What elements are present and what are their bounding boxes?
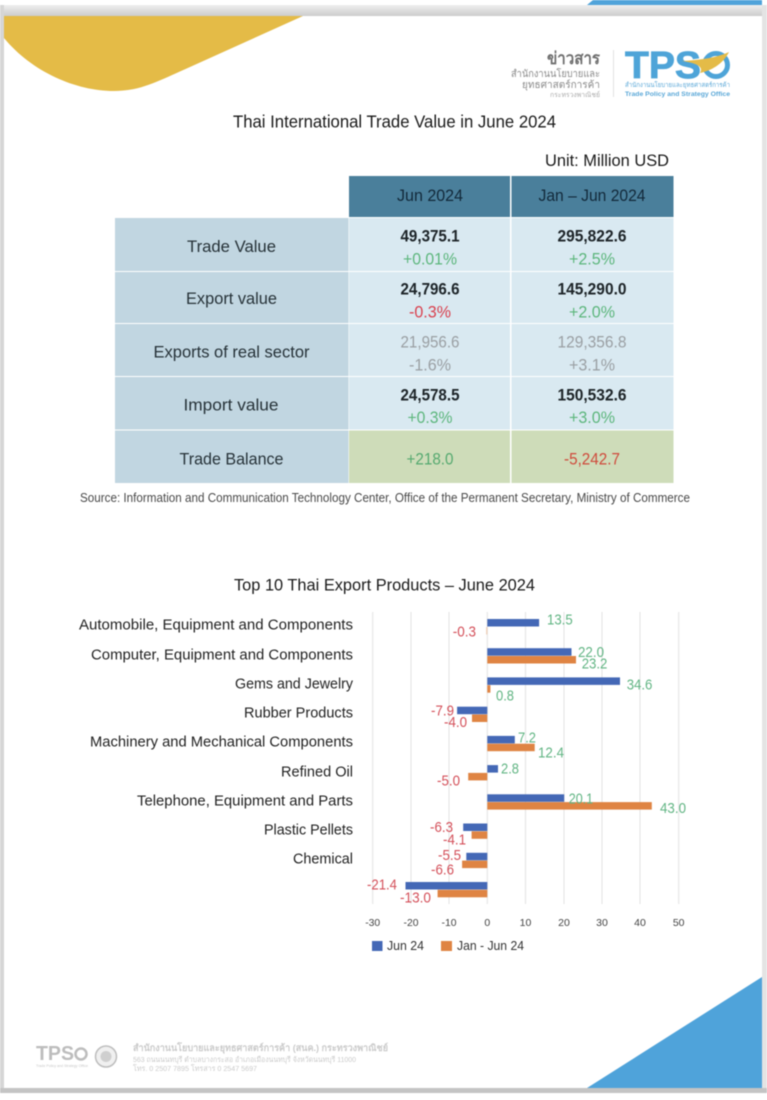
row: trade balance: +218.0 xyxy=(406,450,454,468)
newsletter label: สำนักงานนโยบายและ xyxy=(511,67,600,80)
data labels: -4.1 xyxy=(443,832,466,848)
row: exports of real sector: 21,956.6 xyxy=(400,332,460,352)
table header: Jun 2024 xyxy=(397,186,463,205)
data labels: 12.4 xyxy=(538,744,564,762)
newsletter label: ยุทธศาสตร์การค้า xyxy=(522,79,600,91)
x axis labels: -30 xyxy=(365,917,380,929)
x axis labels: -10 xyxy=(442,917,457,929)
row: trade value: 295,822.6 xyxy=(558,228,626,246)
row: import value: 150,532.6 xyxy=(558,386,626,404)
x axis labels: 50 xyxy=(673,917,685,929)
TPSO logo: สำนักงานนโยบายและยุทธศาสตร์การค้า xyxy=(625,81,730,89)
newsletter label xyxy=(511,49,601,99)
x axis labels: -20 xyxy=(404,917,419,929)
data labels: 0.8 xyxy=(496,688,514,704)
row: exports of real sector: -1.6% xyxy=(409,356,451,374)
blue corner triangle xyxy=(587,977,762,1088)
row: import value: +0.3% xyxy=(408,408,452,427)
data labels: 13.5 xyxy=(547,612,573,628)
unit label: Unit: Million USD xyxy=(545,152,669,170)
row: trade value: +2.5% xyxy=(569,250,615,268)
data labels xyxy=(367,612,686,906)
table header xyxy=(349,176,674,217)
category labels: Computer, Equipment and Components xyxy=(91,646,353,664)
row: trade value: +0.01% xyxy=(403,250,457,268)
data labels: -7.9 xyxy=(431,702,454,720)
data labels: 7.2 xyxy=(518,730,536,746)
row: trade value: 49,375.1 xyxy=(400,228,460,246)
row: export value: Export value xyxy=(186,289,277,308)
data labels: 20.1 xyxy=(569,790,593,808)
bar chart: top 10 export products xyxy=(79,612,686,953)
footer address: 563 ถนนนนทบุรี ตำบลบางกระสอ อำเภอเมืองนนทบุรี จังหวัดนนทบุรี 11000 xyxy=(133,1055,356,1064)
data labels: -21.4 xyxy=(367,876,397,894)
x axis labels: 10 xyxy=(520,917,531,929)
row: trade balance: Trade Balance xyxy=(180,450,284,468)
newsletter label: กระทรวงพาณิชย์ xyxy=(550,91,600,99)
row: export value xyxy=(115,272,674,323)
footer seal xyxy=(96,1046,116,1067)
data labels: -4.0 xyxy=(444,714,467,731)
TPSO logo: Trade Policy and Strategy Office xyxy=(625,91,730,98)
yellow corner shape xyxy=(4,16,303,91)
TPSO logo xyxy=(625,45,730,98)
category labels: Refined Oil xyxy=(281,764,353,780)
footer address xyxy=(133,1042,388,1073)
bars: Jun 24 xyxy=(406,619,620,890)
footer xyxy=(36,1042,388,1073)
x axis labels: 40 xyxy=(634,917,646,929)
data labels: 34.6 xyxy=(627,676,652,694)
bars: Jan - Jun 24 xyxy=(438,627,652,897)
TPSO logo: TPS xyxy=(625,45,701,87)
row: exports of real sector: 129,356.8 xyxy=(558,332,626,352)
row: trade balance xyxy=(115,430,674,483)
row: import value xyxy=(115,377,674,430)
category labels xyxy=(79,616,353,868)
category labels: Chemical xyxy=(293,850,353,868)
category labels: Gems and Jewelry xyxy=(235,676,353,692)
row: exports of real sector xyxy=(115,324,674,376)
trade value table xyxy=(115,176,674,483)
data labels: 2.8 xyxy=(501,760,519,778)
category labels: Telephone, Equipment and Parts xyxy=(137,792,353,810)
source note: Source: Information and Communication Technology Center, Office of the Permanent Secretary, Ministry of Commerce xyxy=(80,491,690,505)
legend: Jun 24 xyxy=(387,938,424,953)
data labels: -5.0 xyxy=(437,772,460,790)
row: export value: +2.0% xyxy=(569,302,615,322)
row: trade value: Trade Value xyxy=(187,237,276,256)
table header: Jan – Jun 2024 xyxy=(538,186,646,205)
legend: Jan - Jun 24 xyxy=(457,938,524,953)
data labels: -5.5 xyxy=(438,847,461,864)
footer logo: TPS xyxy=(36,1043,74,1065)
data labels: -0.3 xyxy=(453,624,476,640)
data labels: 22.0 xyxy=(578,644,604,661)
row: export value: -0.3% xyxy=(409,302,451,322)
category labels: Rubber Products xyxy=(244,704,353,722)
row: import value: Import value xyxy=(184,396,278,414)
category labels: Machinery and Mechanical Components xyxy=(90,734,353,750)
header logo block xyxy=(511,45,730,99)
row: trade balance: -5,242.7 xyxy=(564,450,620,468)
data labels: 43.0 xyxy=(660,800,686,817)
footer address: สำนักงานนโยบายและยุทธศาสตร์การค้า (สนค.) กระทรวงพาณิชย์ xyxy=(133,1042,388,1054)
newsletter label: ข่าวสาร xyxy=(547,49,601,68)
footer logo: Trade Policy and Strategy Office xyxy=(36,1064,88,1068)
row: exports of real sector: Exports of real sector xyxy=(154,342,310,362)
x axis labels xyxy=(365,917,685,929)
legend xyxy=(372,938,524,953)
x axis labels: 30 xyxy=(596,917,608,929)
row: trade value xyxy=(115,218,674,271)
title: trade value: Thai International Trade Value in June 2024 xyxy=(233,112,556,132)
row: export value: 145,290.0 xyxy=(558,280,626,298)
row: exports of real sector: +3.1% xyxy=(569,356,615,374)
x axis labels: 0 xyxy=(484,917,490,929)
footer address: โทร. 0 2507 7895 โทรสาร 0 2547 5697 xyxy=(133,1064,257,1073)
row: import value: 24,578.5 xyxy=(400,386,460,404)
row: export value: 24,796.6 xyxy=(400,280,460,298)
category labels: Plastic Pellets xyxy=(264,822,353,838)
x axis labels: 20 xyxy=(558,917,570,929)
row: import value: +3.0% xyxy=(569,408,615,427)
previous page blue corner xyxy=(587,0,762,5)
footer logo xyxy=(36,1043,88,1068)
data labels: -6.3 xyxy=(430,819,453,836)
title: top 10 exports: Top 10 Thai Export Products – June 2024 xyxy=(234,576,535,594)
category labels: Automobile, Equipment and Components xyxy=(79,616,353,634)
data labels: 23.2 xyxy=(582,656,607,672)
data labels: -13.0 xyxy=(400,890,431,906)
data labels: -6.6 xyxy=(431,862,454,878)
